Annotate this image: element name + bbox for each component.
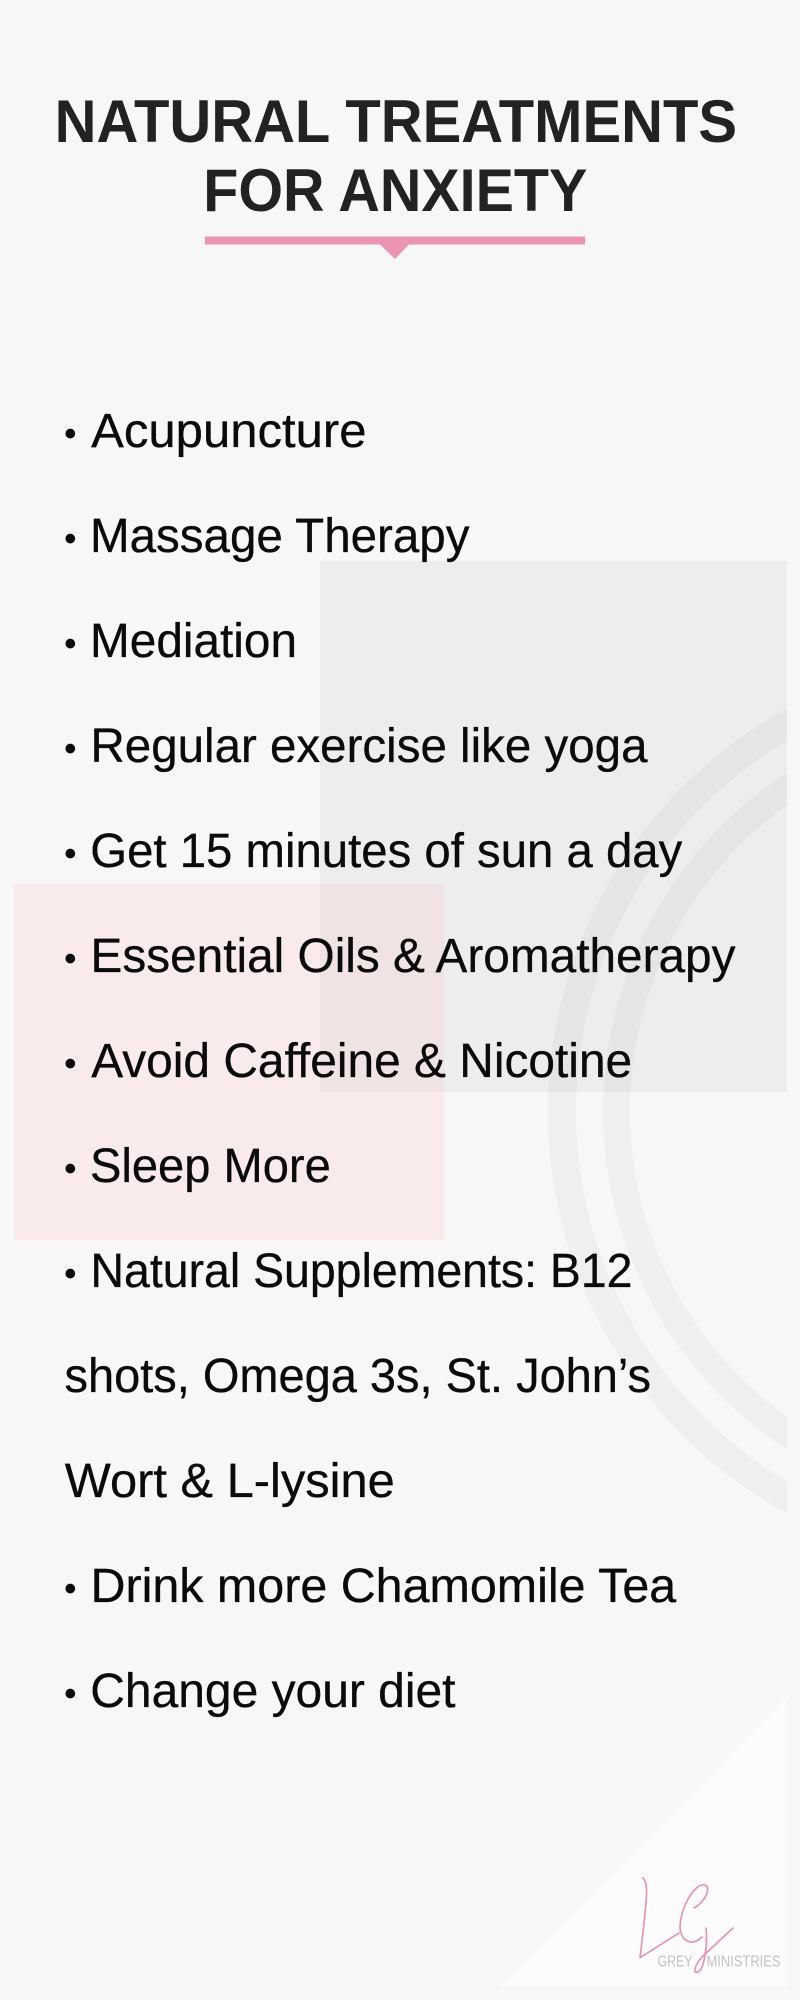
- treatment list: [64, 405, 736, 1718]
- list item: acupuncture: Acupuncture: [91, 405, 366, 458]
- logo wordmark: [658, 1954, 780, 1971]
- panel: pink background square: [14, 884, 444, 1240]
- list item: natural supplements: shots, Omega 3s, St. John’s: [64, 1350, 651, 1403]
- title: FOR ANXIETY: [203, 157, 587, 224]
- decorative concentric rings: [562, 667, 800, 1555]
- list item: regular exercise: •: [64, 728, 77, 769]
- panel: white corner triangle: [500, 1698, 787, 1986]
- logo wordmark: GREY: [658, 1954, 693, 1971]
- list item: natural supplements: Natural Supplements: B12: [90, 1245, 632, 1298]
- list item: natural supplements: •: [64, 1253, 77, 1294]
- list item: chamomile tea: Drink more Chamomile Tea: [90, 1560, 677, 1613]
- list item: essential oils: •: [64, 938, 77, 979]
- list item: massage therapy: Massage Therapy: [90, 510, 470, 563]
- panel: pink and grey overlap: [320, 884, 444, 1092]
- title underline with pointer: [205, 236, 585, 259]
- title: NATURAL TREATMENTS: [55, 88, 737, 155]
- list item: natural supplements: Wort & L-lysine: [65, 1455, 395, 1508]
- list item: mediation: Mediation: [90, 615, 297, 668]
- logo script monogram: [640, 1878, 733, 1972]
- list item: change diet: Change your diet: [90, 1665, 456, 1718]
- list item: sleep more: Sleep More: [90, 1140, 331, 1193]
- list item: acupuncture: •: [64, 413, 77, 454]
- list item: sun: •: [64, 833, 77, 874]
- list item: sun: Get 15 minutes of sun a day: [90, 825, 682, 878]
- logo wordmark: MINISTRIES: [706, 1954, 780, 1971]
- list item: avoid caffeine: Avoid Caffeine & Nicotine: [91, 1035, 632, 1088]
- list item: massage therapy: •: [64, 518, 77, 559]
- list item: mediation: •: [64, 623, 77, 664]
- title: [55, 88, 737, 224]
- list item: avoid caffeine: •: [64, 1043, 77, 1084]
- list item: change diet: •: [64, 1673, 77, 1714]
- panel: grey background square: [320, 561, 787, 1092]
- list item: regular exercise: Regular exercise like yoga: [90, 720, 648, 773]
- list item: essential oils: Essential Oils & Aromatherapy: [90, 930, 736, 983]
- logo: Grey Ministries: [640, 1878, 780, 1972]
- list item: chamomile tea: •: [64, 1568, 77, 1609]
- list item: natural supplements: [64, 1245, 651, 1508]
- list item: sleep more: •: [64, 1148, 77, 1189]
